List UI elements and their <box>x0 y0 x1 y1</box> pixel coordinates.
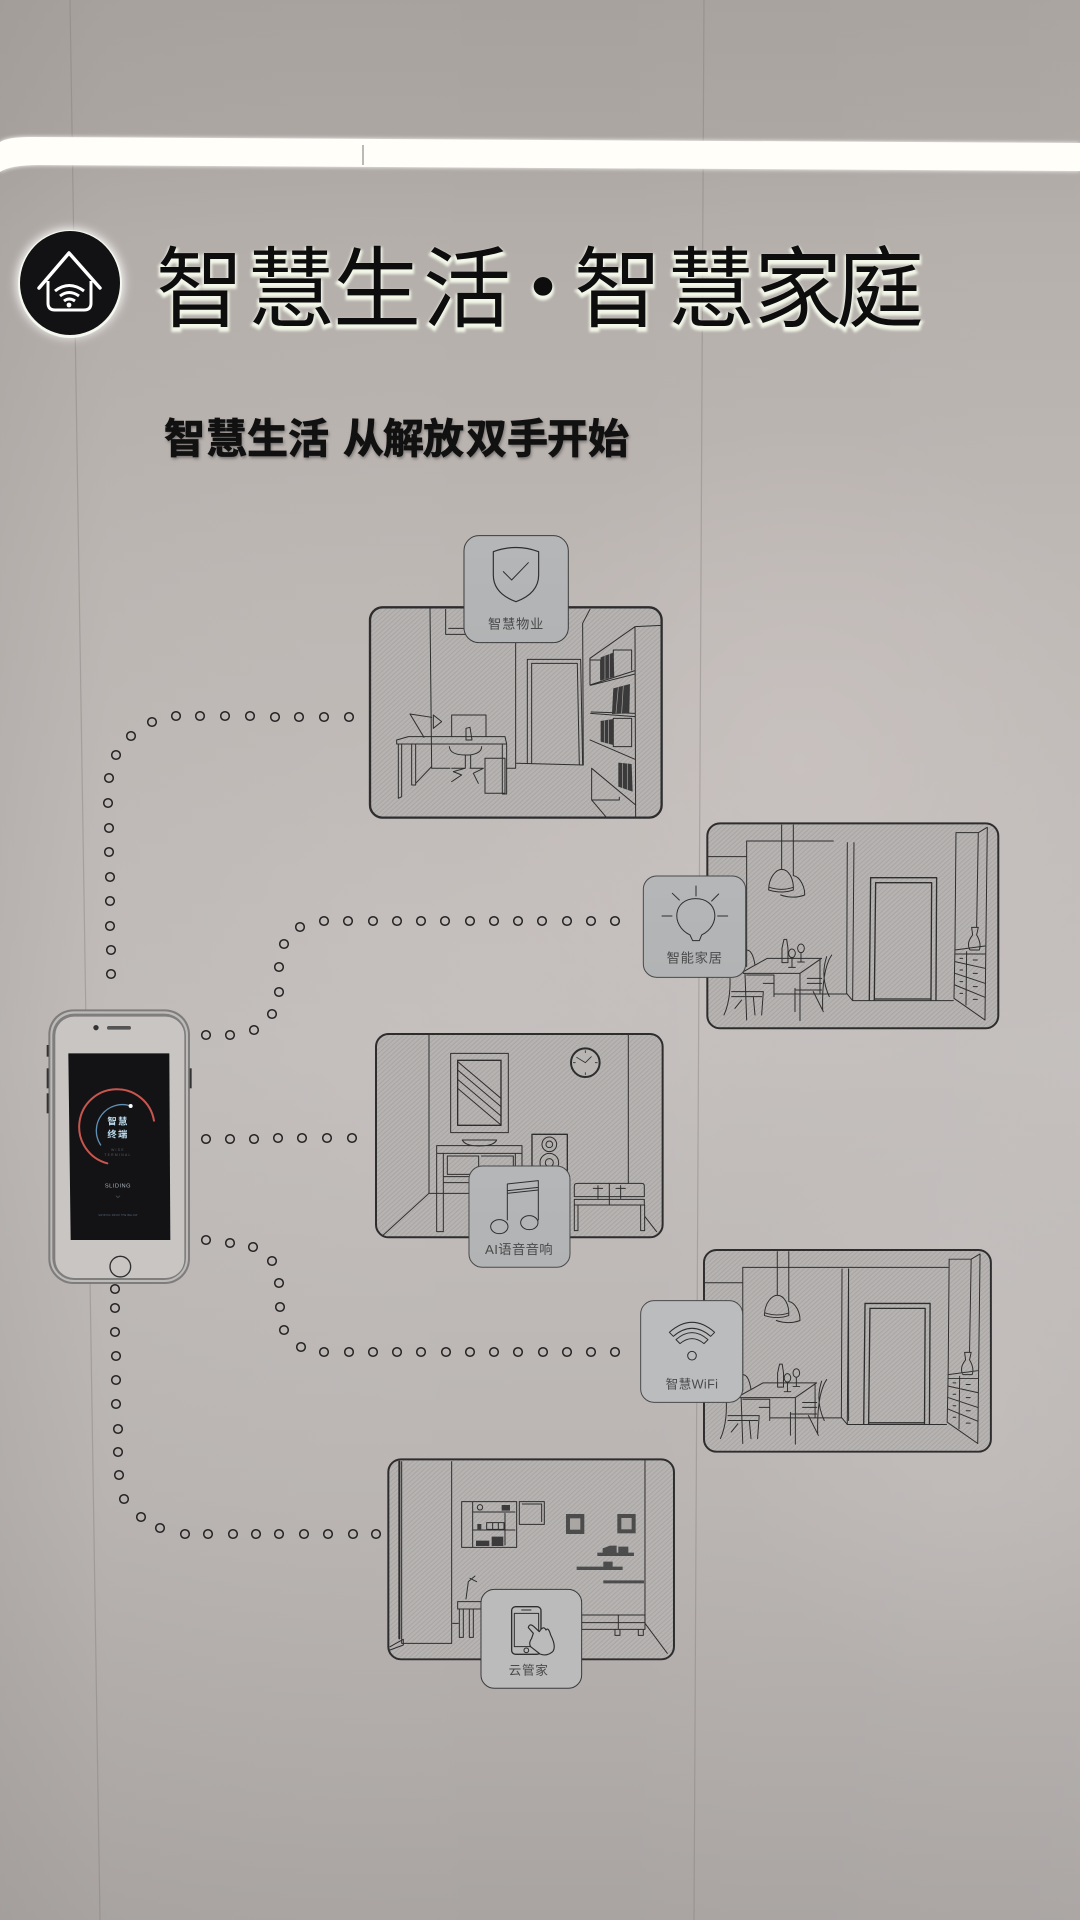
phone: smart terminal <box>47 1009 192 1284</box>
room panel: dining room (smart home) <box>643 823 998 1028</box>
phone screen: SLIDING <box>105 1184 131 1190</box>
icon tile: smart home bulb: 智能家居 <box>667 950 723 966</box>
room panel: office (smart property) <box>370 536 662 818</box>
subtitle: 智慧生活从解放双手开始 <box>165 407 630 467</box>
top light strip <box>0 137 1080 172</box>
room panel: living room (cloud butler) <box>388 1459 674 1688</box>
icon tile: WiFi: 智慧WiFi <box>666 1377 718 1392</box>
title: 智慧生活·智慧家庭 <box>156 222 924 349</box>
icon tile: cloud butler phone and hand: 云管家 <box>509 1663 549 1678</box>
phone screen: 智慧 <box>107 1116 129 1127</box>
phone screen: WISE <box>111 1148 125 1152</box>
room panel: hallway (AI speaker) <box>376 1034 663 1267</box>
title: 智慧生活·智慧家庭 <box>156 219 924 346</box>
icon tile: AI speaker music note: AI语音音响 <box>485 1241 553 1257</box>
icon tile: AI speaker music note <box>469 1166 570 1267</box>
dotted connector lines <box>104 712 619 1538</box>
icon tile: cloud butler phone and hand <box>481 1589 582 1688</box>
icon tile: smart property <box>464 536 568 643</box>
icon tile: WiFi <box>641 1301 743 1402</box>
phone screen: 终端 <box>107 1128 129 1139</box>
room panel: dining room (smart WiFi) <box>641 1250 991 1452</box>
logo: round house wifi icon <box>17 229 123 338</box>
icon tile: smart property: 智慧物业 <box>488 617 544 632</box>
icon tile: smart home bulb <box>643 876 746 977</box>
subtitle: 智慧生活从解放双手开始 <box>164 405 629 465</box>
phone screen <box>68 1053 170 1240</box>
phone screen: SWIPING FROM THE BELOW <box>98 1215 138 1217</box>
phone screen: TERMINAL <box>104 1153 132 1157</box>
